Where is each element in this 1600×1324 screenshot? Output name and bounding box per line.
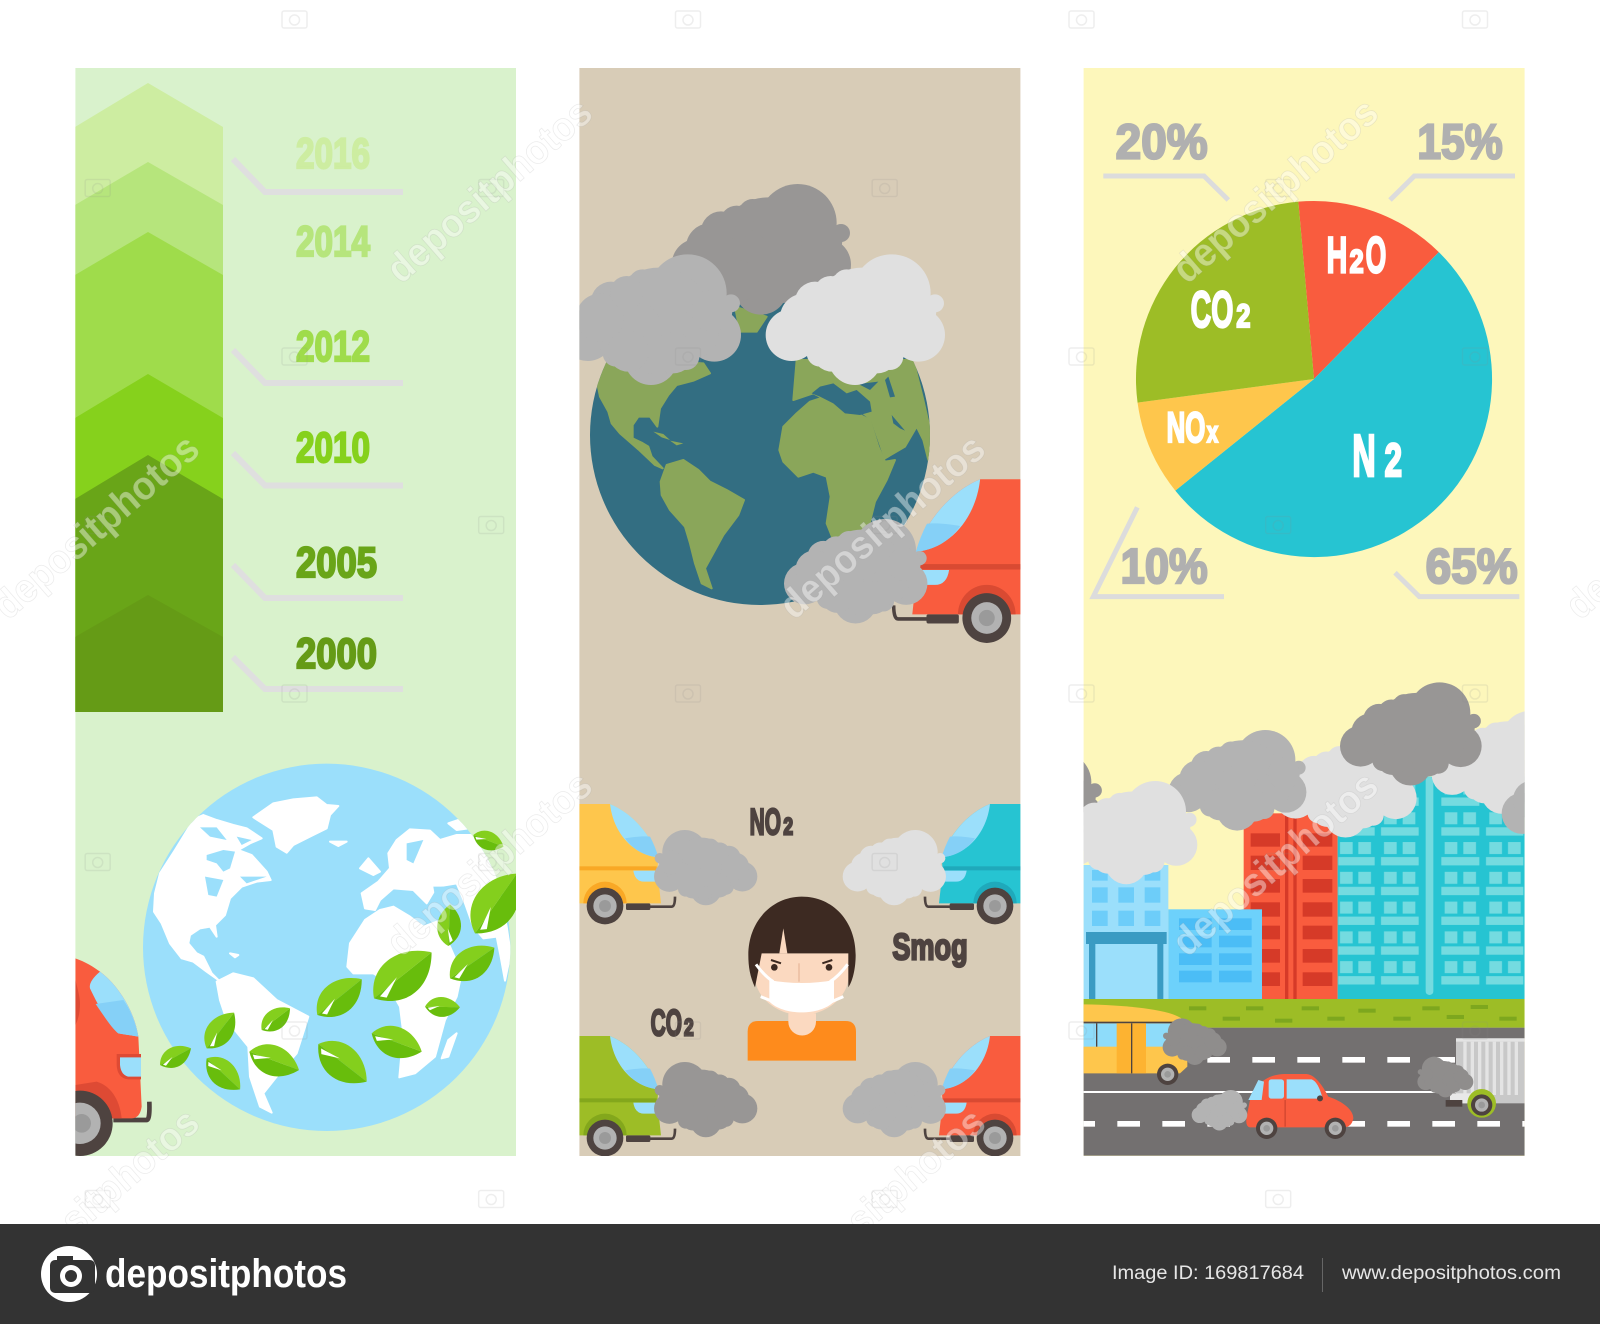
light blue building [1083, 865, 1168, 999]
teal car [843, 804, 1021, 924]
percentage callouts: 10% [1121, 539, 1208, 594]
red car with exhaust [784, 479, 1021, 643]
label: NO2: NO [750, 802, 781, 843]
teal tower [1338, 777, 1525, 999]
slice label: CO2: 2 [1236, 297, 1250, 334]
red car, rear view [75, 958, 152, 1156]
panel: emissions timeline and green globe [47, 67, 534, 1156]
smog clouds over city [961, 682, 1600, 884]
timeline year labels: 2005 [296, 539, 377, 587]
percentage callouts [1116, 114, 1518, 594]
slice label: NOx: NO [1167, 404, 1205, 452]
person wearing mask [748, 897, 856, 1061]
slice label: N2: N [1352, 422, 1376, 489]
smog clouds over globe [562, 184, 945, 385]
watermark overlays: depositphotos [378, 90, 601, 292]
stacked arrow chart [75, 83, 223, 712]
pie chart with labels [1093, 114, 1519, 597]
yellow car [579, 804, 757, 924]
slice label: CO2 [1191, 290, 1250, 329]
road [1083, 1028, 1525, 1156]
label: Smog: Smog [892, 927, 968, 968]
blue low building [1168, 909, 1262, 999]
panel: smog over the earth [562, 67, 1021, 1156]
watermark overlays: depositphotos [378, 763, 601, 965]
globe [143, 764, 511, 1131]
timeline year labels: 2014 [296, 218, 370, 266]
slice label: H2O: 2 [1350, 243, 1364, 280]
watermark overlays: depositphotos [1164, 90, 1387, 292]
pie slices [1136, 201, 1492, 557]
illustration: city with smog and traffic [961, 682, 1600, 1156]
watermark overlays: depositphotos [771, 426, 994, 628]
panel: exhaust composition and polluted city [1084, 68, 1525, 1156]
green car [579, 1036, 757, 1156]
label: CO2: 2 [684, 1014, 694, 1041]
grass strip [1083, 999, 1525, 1028]
percentage callouts: 15% [1417, 114, 1503, 169]
red building [1244, 813, 1338, 999]
slice label: CO2: CO [1191, 281, 1233, 338]
illustration: polluted earth [562, 184, 1021, 643]
timeline year labels: 2000 [296, 630, 377, 678]
slice label: N2: 2 [1385, 434, 1402, 486]
footer logo icon [41, 1246, 97, 1302]
footer bar [0, 1224, 1600, 1324]
illustration: white-continent globe with leaves and car [47, 764, 534, 1156]
percentage callouts: 20% [1116, 114, 1208, 169]
label: CO2: CO [651, 1002, 682, 1043]
slice label: H2O [1328, 236, 1386, 274]
container truck [1417, 1038, 1525, 1118]
timeline year labels [296, 130, 377, 678]
slice label: NOx [1168, 411, 1220, 444]
yellow bus [1083, 1004, 1227, 1085]
slice label: N2 [1354, 434, 1402, 478]
image id: Image ID: 169817684 [1112, 1263, 1304, 1284]
illustration: cars around masked person [579, 802, 1021, 1156]
red car on road [1192, 1074, 1353, 1139]
slice label: H2O: H [1327, 227, 1347, 284]
red car [843, 1036, 1021, 1156]
slice label: NOx: x [1207, 416, 1218, 449]
label: NO2 [750, 807, 794, 836]
website address: www.depositphotos.com [1341, 1263, 1561, 1284]
watermark overlays: depositphotos [771, 1100, 994, 1302]
watermark overlays: depositphotos [1164, 763, 1387, 965]
slice label: H2O: O [1366, 227, 1386, 284]
green leaves [155, 826, 534, 1099]
timeline year labels: 2012 [296, 323, 370, 371]
earth globe [590, 302, 930, 605]
label: NO2: 2 [783, 814, 793, 841]
timeline year labels: 2010 [296, 424, 370, 472]
percentage callouts: 65% [1426, 539, 1518, 594]
timeline year labels: 2016 [296, 130, 370, 178]
footer logo wordmark: depositphotos [105, 1252, 347, 1296]
label: CO2 [650, 1008, 694, 1037]
